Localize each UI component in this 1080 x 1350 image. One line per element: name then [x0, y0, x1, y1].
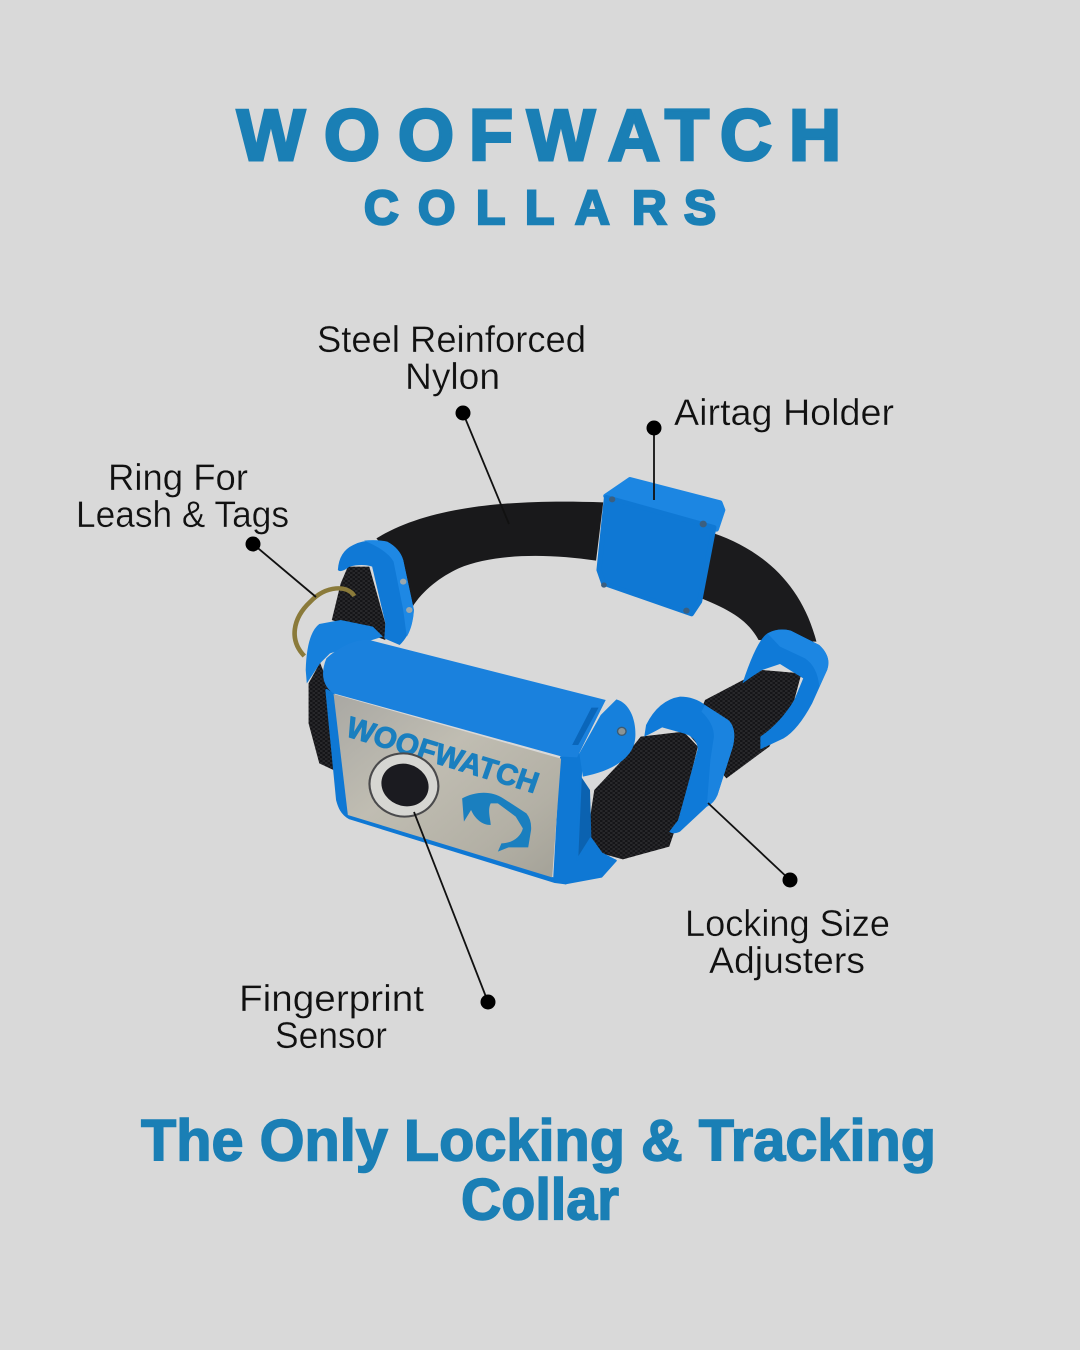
- label: Ring For Leash & Tags: [76, 457, 289, 535]
- nylon band: left stub: [309, 663, 341, 773]
- label: Ring For Leash & Tags: Ring For: [108, 457, 248, 498]
- title: WOOFWATCH: T: [665, 96, 709, 176]
- label: Airtag Holder: Airtag Holder: [674, 392, 894, 433]
- right slider: [742, 629, 828, 749]
- front slider: [644, 697, 734, 833]
- plate engraved wordmark: WOOFWATCH: [342, 711, 543, 800]
- label: Fingerprint Sensor: Sensor: [275, 1015, 387, 1056]
- title: WOOFWATCH: W: [527, 96, 595, 176]
- label: Steel Reinforced Nylon: [317, 319, 586, 397]
- tagline: The Only Locking & Tracking: [141, 1108, 936, 1174]
- subtitle: COLLARS: [364, 182, 716, 235]
- label: Ring For Leash & Tags: Leash & Tags: [76, 494, 289, 535]
- title: WOOFWATCH: W: [237, 96, 305, 176]
- housing: screw: [617, 727, 626, 735]
- housing: hinge tab: [579, 699, 635, 777]
- subtitle: COLLARS: L: [525, 182, 554, 235]
- label: Fingerprint Sensor: Fingerprint: [239, 978, 425, 1019]
- subtitle: COLLARS: A: [575, 182, 610, 235]
- housing: interior: [575, 775, 591, 865]
- brass ring: [295, 588, 354, 656]
- title: WOOFWATCH: O: [398, 96, 454, 176]
- pointer: adjusters: [708, 803, 798, 888]
- wolf logo: [462, 793, 531, 852]
- label: Steel Reinforced Nylon: Steel Reinforced: [317, 319, 586, 360]
- airtag holder: [599, 479, 723, 614]
- lower-left slider: [306, 620, 383, 683]
- label: Fingerprint Sensor: [239, 978, 425, 1056]
- main housing: [323, 640, 635, 883]
- nylon band: front loop: [587, 732, 698, 859]
- subtitle: COLLARS: O: [418, 182, 455, 235]
- pointer: fingerprint: [414, 812, 496, 1010]
- nylon band: back: [376, 502, 603, 607]
- housing: right wall: [554, 754, 616, 883]
- subtitle: COLLARS: R: [632, 182, 667, 235]
- pointer: nylon: [456, 406, 509, 524]
- nylon band: near ring: [332, 567, 385, 640]
- fingerprint sensor: [357, 742, 451, 828]
- pointer: ring: [246, 536, 316, 597]
- title: WOOFWATCH: F: [469, 96, 513, 176]
- title: WOOFWATCH: A: [608, 96, 660, 176]
- housing: frame: [326, 690, 566, 883]
- metal plate: [334, 694, 561, 877]
- upper-left slider: [338, 540, 414, 645]
- collar photo illustration: [295, 479, 828, 883]
- label: Locking Size Adjusters: [685, 903, 890, 981]
- title: WOOFWATCH: H: [789, 96, 841, 176]
- label: Locking Size Adjusters: Locking Size: [685, 903, 890, 944]
- tagline: [141, 1108, 936, 1232]
- subtitle: COLLARS: S: [684, 182, 716, 235]
- subtitle: COLLARS: L: [476, 182, 505, 235]
- subtitle: COLLARS: C: [364, 182, 399, 235]
- nylon band: right back: [701, 533, 816, 642]
- housing: top lid: [323, 640, 606, 757]
- label: Steel Reinforced Nylon: Nylon: [405, 356, 500, 397]
- housing: slot: [572, 708, 599, 745]
- title: WOOFWATCH: C: [720, 96, 772, 176]
- label: Locking Size Adjusters: Adjusters: [709, 940, 865, 981]
- pointer: airtag: [646, 420, 662, 500]
- title: WOOFWATCH: O: [324, 96, 380, 176]
- title: WOOFWATCH: [237, 96, 841, 176]
- tagline: Collar: [461, 1168, 619, 1232]
- nylon band: right: [691, 670, 801, 778]
